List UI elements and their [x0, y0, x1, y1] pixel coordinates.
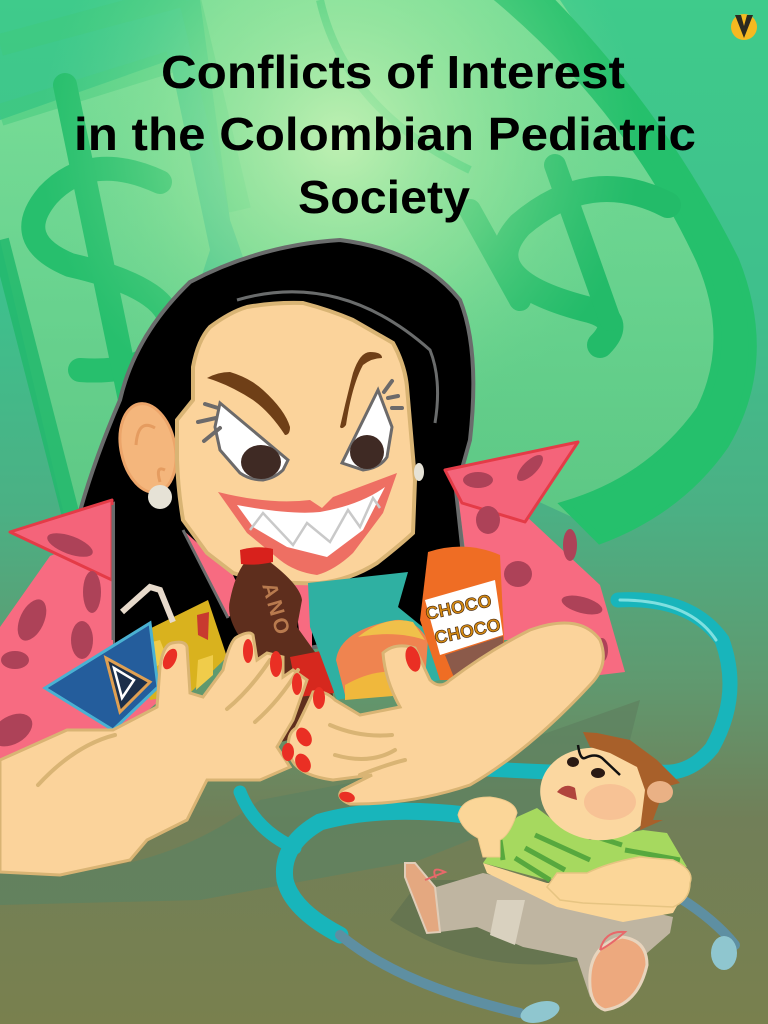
child head: [534, 741, 660, 847]
hair highlight: [237, 292, 438, 423]
child ear: [647, 781, 673, 803]
child arm on belly: [547, 857, 691, 907]
child hand raised: [458, 797, 517, 857]
ear: [112, 398, 184, 498]
child shoe left: [405, 863, 440, 933]
left eye: [198, 403, 288, 480]
blue pack with logo: [45, 623, 158, 730]
child belly: [483, 863, 690, 922]
child cheeks: [584, 784, 636, 820]
choco jar: CHOCO: [433, 614, 502, 648]
jacket left: [0, 530, 160, 800]
jacket pattern: [0, 451, 608, 753]
jacket right: [458, 495, 625, 675]
collar right: [445, 442, 578, 522]
red nails: [160, 639, 423, 804]
hair strand: [113, 505, 228, 640]
title: Society: [298, 171, 470, 223]
mouth: [218, 473, 397, 575]
child: [405, 732, 691, 1010]
child pants: [433, 873, 673, 997]
arms and hands: [0, 623, 603, 875]
shirt stripes: [500, 835, 680, 880]
woman: [0, 240, 625, 800]
banknote with dollar signs: [0, 0, 768, 540]
child brows: [578, 745, 620, 775]
child shirt: [483, 808, 687, 880]
left arm and hand: [0, 633, 307, 875]
stethoscope earpiece bottom: [518, 997, 562, 1024]
child hair: [583, 732, 680, 830]
child shoe right: [590, 937, 647, 1010]
products: [45, 547, 506, 743]
pink neckline: [183, 530, 312, 660]
choco jar: CHOCO: [424, 590, 493, 624]
ground shadows: [0, 700, 680, 965]
earrings: [148, 463, 424, 509]
title: Conflicts of Interest: [161, 46, 625, 98]
right arm and hand: [288, 623, 603, 804]
chocolate bottle: [229, 547, 337, 743]
face: [177, 303, 415, 583]
dollar sign right: [470, 165, 668, 345]
right eye: [342, 381, 402, 470]
collar left: [10, 500, 112, 580]
dollar sign left: [33, 85, 171, 400]
stethoscope: [240, 600, 737, 1024]
chips bag: [308, 572, 440, 700]
centre glow: [0, 0, 768, 480]
pants highlight: [490, 900, 525, 945]
logo badge: [731, 14, 757, 40]
stethoscope earpiece right: [711, 936, 737, 970]
choco jar: [420, 547, 506, 680]
title: [74, 46, 696, 223]
child mouth: [557, 786, 577, 800]
hair: [75, 240, 473, 660]
chocolate bottle: ANO: [257, 580, 295, 640]
title: in the Colombian Pediatric: [74, 108, 696, 160]
juice box: [122, 587, 227, 700]
brows: [207, 352, 382, 435]
child eyes: [567, 757, 605, 778]
laces: [425, 870, 625, 950]
